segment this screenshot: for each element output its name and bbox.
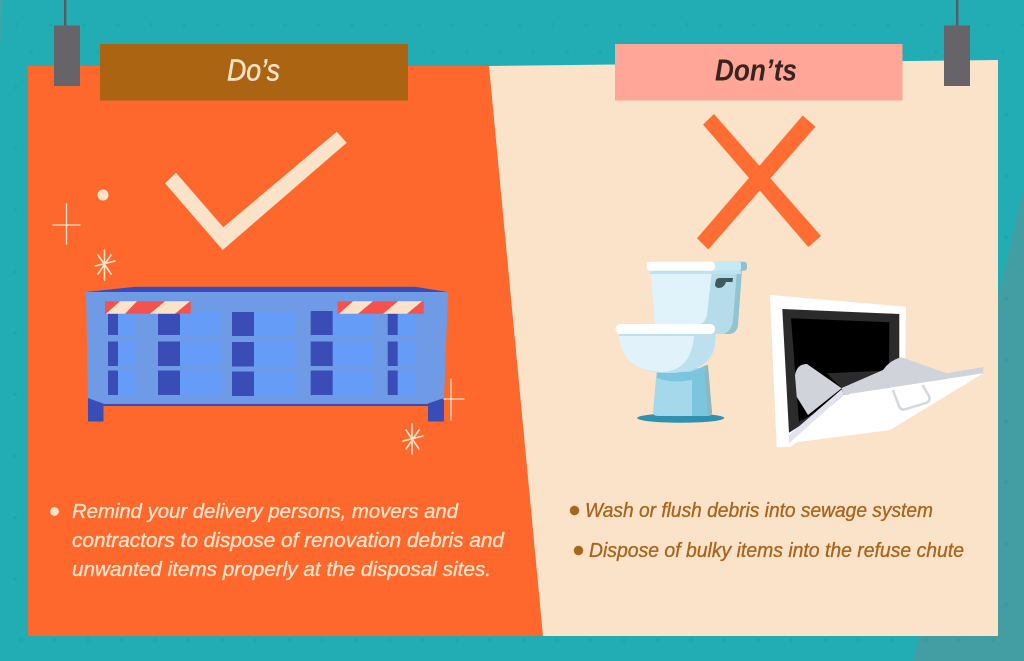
tank xyxy=(650,268,742,334)
text: don'ts list: Wash or flush debris into sewage system xyxy=(585,500,933,522)
icon: refuse chute xyxy=(770,295,983,447)
bin slats xyxy=(117,311,416,396)
icon: check mark xyxy=(165,132,347,250)
banner: do's heading: Do’s xyxy=(227,52,280,88)
icon: toilet xyxy=(616,262,747,423)
text: don'ts list xyxy=(570,500,964,562)
peg: right xyxy=(944,0,970,86)
text: don'ts list: Dispose of bulky items into the refuse chute xyxy=(589,540,964,562)
text: do's list xyxy=(50,501,505,581)
text: do's list: unwanted items properly at the disposal sites. xyxy=(72,559,491,581)
icon: sparkles left xyxy=(53,190,115,280)
chute side flaps xyxy=(795,364,842,415)
text: do's list: Remind your delivery persons, movers and xyxy=(72,501,459,523)
banner: don'ts heading: Don’ts xyxy=(715,52,797,88)
pedestal xyxy=(653,368,712,416)
hazard tape right xyxy=(338,301,424,314)
chute opening floor xyxy=(827,371,893,388)
icon: sparkles right xyxy=(403,379,464,454)
bowl xyxy=(619,333,716,373)
icon: cross xyxy=(697,114,821,250)
text: do's list: contractors to dispose of renovation debris and xyxy=(72,530,505,552)
chute door xyxy=(789,373,983,443)
panel: do's xyxy=(28,66,543,636)
hazard tape left xyxy=(105,301,191,314)
panel: don'ts xyxy=(489,60,998,636)
peg: left xyxy=(54,0,80,86)
banner: do's heading xyxy=(100,44,408,100)
banner: don'ts heading xyxy=(615,44,902,100)
icon: skip bin xyxy=(86,287,448,422)
